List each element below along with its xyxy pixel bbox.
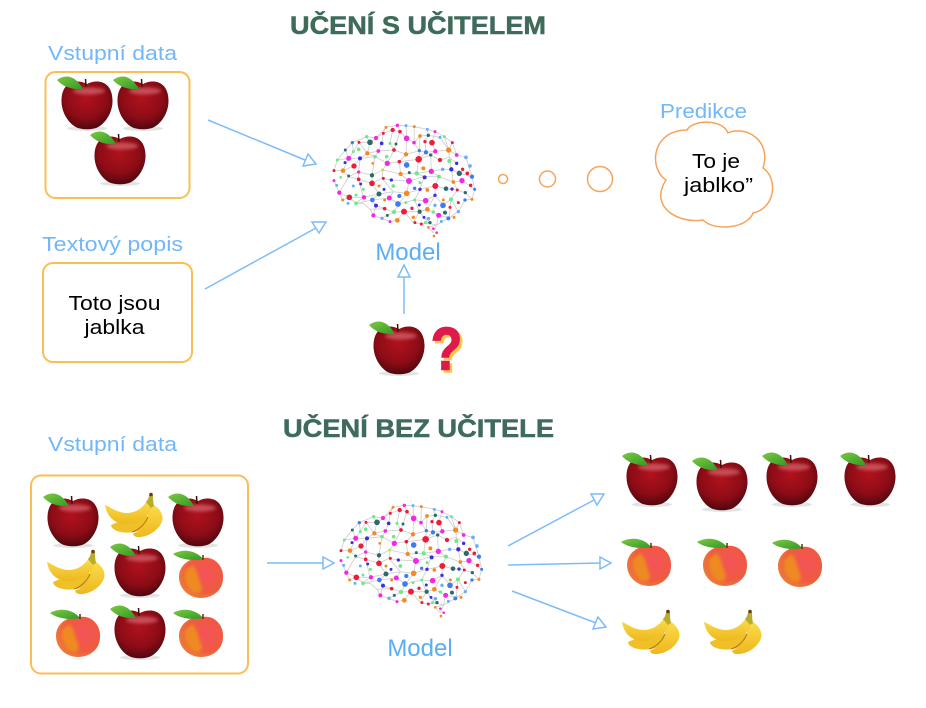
icon: question mark: ? (431, 315, 462, 382)
label: text description: Textový popis (42, 234, 183, 256)
arrow: data to model (208, 120, 316, 166)
panel: supervised learning (42, 10, 773, 385)
text description box: Toto jsou (68, 293, 160, 315)
mixed fruit input box (31, 476, 248, 674)
output: peach cluster (621, 539, 822, 587)
arrow: to apples (508, 494, 604, 546)
brain model (333, 124, 476, 237)
output: banana cluster (622, 610, 762, 654)
label: model: Model (375, 239, 441, 266)
label: input data: Vstupní data (48, 43, 178, 65)
brain model (340, 504, 483, 617)
label: model: Model (387, 635, 453, 662)
prediction cloud: To je (692, 151, 740, 173)
title: supervised: UČENÍ S UČITELEM (290, 10, 546, 40)
arrow: input to model (267, 557, 334, 569)
label: prediction: Predikce (660, 101, 747, 123)
title: unsupervised: UČENÍ BEZ UČITELE (283, 413, 554, 443)
panel: unsupervised learning (31, 413, 896, 674)
icon: query apple (369, 322, 425, 376)
arrow: to bananas (512, 591, 606, 629)
thought bubbles (498, 166, 612, 192)
label: input data: Vstupní data (48, 434, 178, 456)
arrow: to peaches (508, 557, 611, 569)
arrow: query to model (398, 265, 410, 314)
text description box (43, 263, 192, 362)
icon: question mark: ? (433, 317, 465, 385)
prediction cloud: jablko” (683, 175, 753, 197)
output: apple cluster (622, 453, 896, 512)
arrow: description to model (205, 222, 326, 289)
prediction cloud (656, 122, 773, 227)
input box with apples (46, 72, 190, 198)
text description box: jablka (83, 317, 145, 339)
